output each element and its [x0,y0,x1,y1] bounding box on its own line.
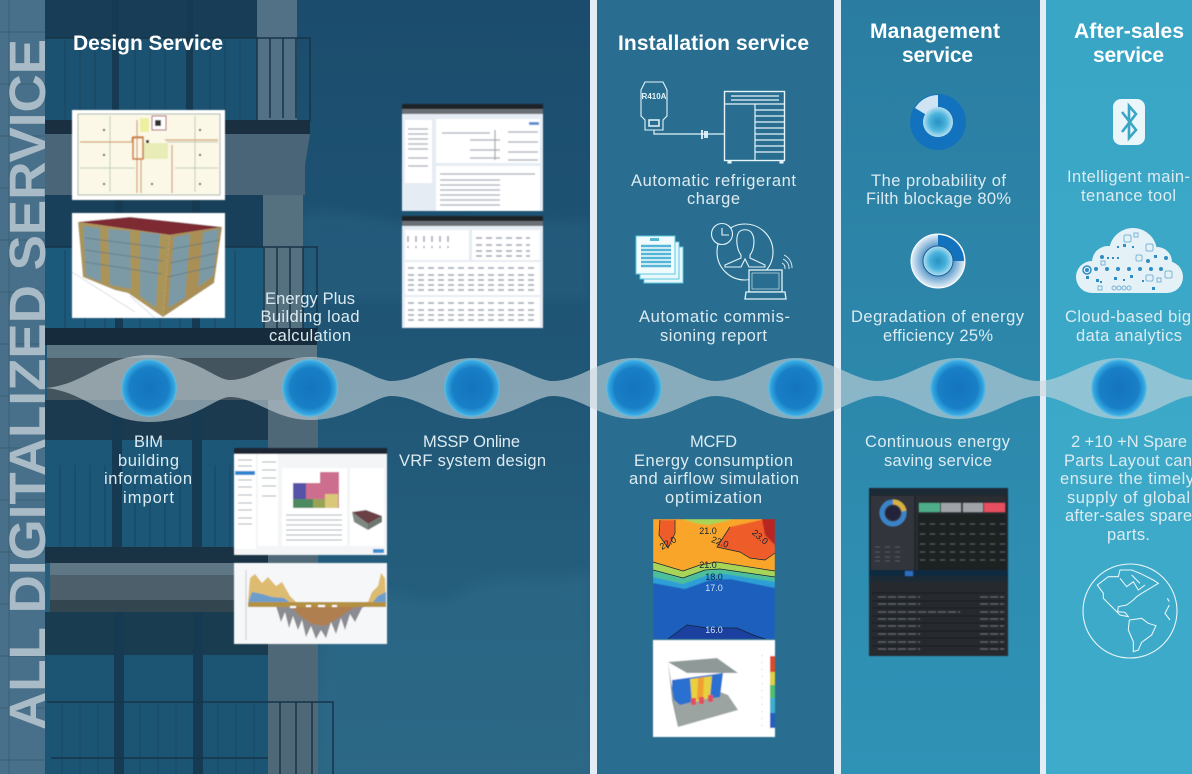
text: cloud analytics: data analytics [1076,327,1182,345]
image: scatter chart [234,563,387,644]
node 2 [282,359,338,417]
text: energy efficiency: Degradation of energy [851,308,1025,326]
text: continuous saving: Continuous energy [865,433,1011,451]
text: MCFD: Energy consumption [634,452,793,470]
balcony slabs [45,120,310,134]
side title strip [0,0,56,774]
panel: installation service [597,0,834,774]
text: spare parts: supply of global [1067,489,1190,507]
node 6 [930,359,986,417]
node 7 [1091,359,1147,417]
text: MCFD: MCFD [690,433,737,451]
icon: donut 80% [910,94,966,150]
image: floor plan [72,110,225,200]
text: spare parts: ensure the timely [1060,470,1192,488]
text: filth blockage: Filth blockage 80% [866,190,1011,208]
vertical title: ALL DIGITALIZED SERVICE [0,39,56,730]
text: cloud analytics [1065,308,1191,345]
text: continuous saving [865,433,1011,470]
text: MSSP online: VRF system design [399,452,546,470]
chart: temperature contour [653,519,775,639]
text: energy plus: Building load [260,308,360,326]
text: energy efficiency [851,308,1025,345]
image: CFD simulation [653,640,775,737]
heading: after-sales service: After-sales [1074,20,1184,43]
text: BIM: information [104,470,192,488]
icon: report pages [636,236,683,283]
image: dashboard screenshots [869,488,1008,656]
text: spare parts: after-sales spare [1065,507,1192,525]
flow ribbon with nodes [45,355,1192,422]
chart: temperature contour: 17.0 [705,583,723,593]
text: automatic refrigerant charge: charge [687,190,740,208]
heading: management service: service [902,44,973,67]
text: filth blockage: The probability of [871,172,1006,190]
heading: after-sales service: service [1093,44,1164,67]
text: BIM: import [123,489,174,507]
icon: bluetooth tool [1113,99,1145,145]
text: spare parts: Parts Layout can [1064,452,1192,470]
chart: temperature contour: 23.0 [750,528,770,546]
heading: after-sales service [1074,20,1184,67]
text: MCFD: and airflow simulation [629,470,799,488]
node 5 [768,359,824,417]
node 4 [606,359,662,417]
chart: temperature contour: 18.0 [705,572,723,582]
text: energy plus [260,290,360,345]
image: room layout software [234,448,387,555]
text: automatic commissioning report: Automatic commis- [639,308,790,326]
text: filth blockage [866,172,1011,208]
image: 3D building model [72,213,225,318]
text: cloud analytics: Cloud-based big [1065,308,1191,326]
text: automatic refrigerant charge [631,172,796,208]
panel: after-sales service [1046,0,1192,774]
text: MCFD [629,433,799,507]
text: intelligent maintenance: Intelligent main- [1067,168,1190,186]
heading: management service: Management [870,20,1000,43]
icon: globe [1083,564,1177,658]
text: BIM [104,433,192,507]
icon: refrigerant cylinder and outdoor unit [641,82,785,163]
icon: donut 25% [911,234,965,288]
text: energy plus: calculation [269,327,351,345]
node 1 [121,359,177,417]
text: spare parts: parts. [1107,526,1150,544]
chart: temperature contour: 22.0 [710,534,730,550]
text: automatic commissioning report: sioning report [660,327,767,345]
heading: management service [870,20,1000,67]
chart: temperature contour: 21.0 [699,560,717,570]
chart: temperature contour: 22.0 [658,534,678,552]
image: VRF design screenshot 2 [402,216,543,328]
image: VRF design screenshot 1 [402,104,543,211]
building wall column [257,0,297,122]
chart: temperature contour: 21.0 [699,526,717,536]
icon: person, clock and laptop [712,224,792,299]
background: building and sky [0,0,590,774]
text: MCFD: optimization [665,489,762,507]
text: BIM: BIM [134,433,163,451]
heading: installation service: Installation service [618,32,809,55]
text: intelligent maintenance: tenance tool [1081,187,1176,205]
text: MSSP online: MSSP Online [423,433,520,451]
panel gaps [590,0,1046,774]
text: energy efficiency: efficiency 25% [883,327,993,345]
node 3 [444,359,500,417]
text: automatic commissioning report [639,308,790,345]
text: MSSP online [399,433,546,470]
windows [45,0,257,38]
text: BIM: building [118,452,179,470]
text: continuous saving: saving service [884,452,992,470]
text: intelligent maintenance [1067,168,1190,205]
heading: design service: Design Service [73,32,223,55]
text: energy plus: Energy Plus [265,290,355,308]
chart: temperature contour: 16.0 [705,625,723,635]
icon: data cloud [1076,228,1183,293]
icon: refrigerant cylinder and outdoor unit: R410A [642,92,667,101]
panel: management service [841,0,1040,774]
text: spare parts: 2 +10 +N Spare [1071,433,1187,451]
text: spare parts [1060,433,1192,544]
balcony railings [45,38,333,774]
text: automatic refrigerant charge: Automatic refrigerant [631,172,796,190]
